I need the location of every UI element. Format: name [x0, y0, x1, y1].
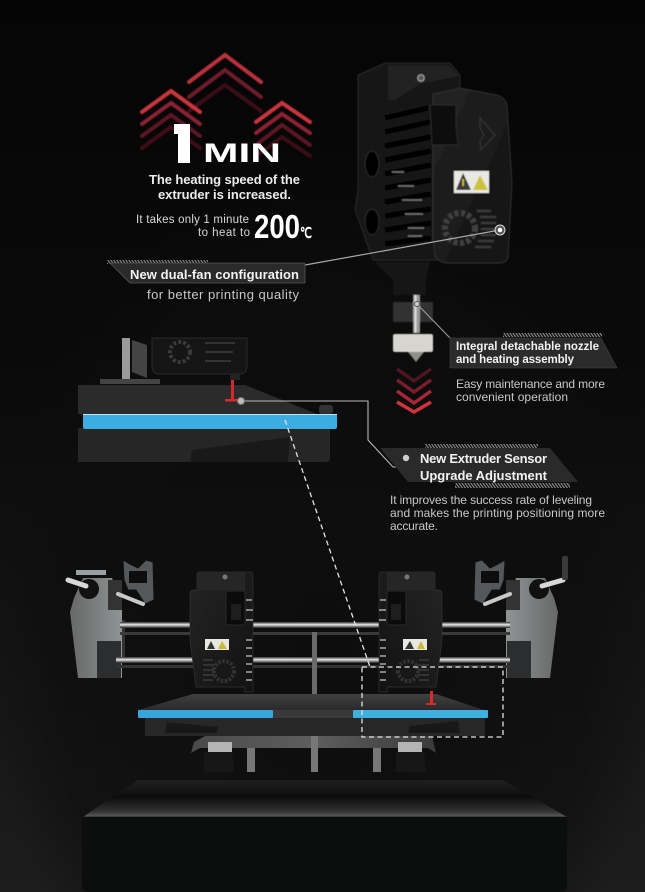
left gantry bracket [68, 560, 154, 678]
text: heating speed: The heating speed of the [149, 172, 300, 187]
text: one minute to 200 degrees: ℃ [300, 225, 312, 242]
right gantry bracket [474, 560, 563, 678]
cropped extruder [152, 338, 247, 380]
red sensor beam [225, 380, 239, 402]
text: one minute to 200 degrees: to heat to [198, 227, 250, 239]
description [456, 377, 605, 404]
leader dot [414, 302, 420, 306]
leader line [417, 304, 450, 338]
heading: 1 MIN [174, 124, 281, 168]
heating block [393, 334, 433, 352]
heat break [375, 262, 433, 333]
blue plate [83, 414, 337, 429]
bed bracket ribs [190, 437, 290, 462]
text: heating speed: extruder is increased. [158, 187, 291, 202]
text: one minute to 200 degrees: It takes only 1 minute [136, 214, 249, 226]
description: and makes the printing positioning more [390, 506, 605, 520]
print bed [138, 691, 488, 736]
fan slats [475, 211, 496, 247]
under-bed supports [191, 736, 436, 772]
right small extruder [379, 572, 442, 692]
extruder rear housing [355, 63, 460, 260]
side holes [365, 151, 379, 235]
callout: dual-fan configuration [107, 225, 505, 302]
description: accurate. [390, 519, 438, 533]
description: convenient operation [456, 390, 568, 404]
icon: red heat chevrons [142, 55, 310, 156]
label text [420, 451, 548, 483]
leader line [241, 401, 406, 467]
left vents [385, 108, 431, 244]
icon: red down chevrons [397, 369, 431, 412]
stripes [107, 260, 208, 264]
label dot [403, 455, 409, 461]
text: heating speed [149, 172, 300, 202]
clip block [430, 105, 458, 145]
left small extruder [190, 572, 253, 692]
label text [456, 341, 599, 366]
guide rails [116, 622, 510, 696]
extruder front cover [433, 88, 512, 263]
icon: top screw [418, 75, 424, 81]
bed base [78, 428, 330, 462]
base rail [100, 379, 160, 384]
leader dot [495, 225, 505, 235]
label plate [380, 448, 578, 482]
icon: arrow logo [480, 118, 495, 150]
label text: Integral detachable nozzle [456, 341, 599, 353]
extruder top cap [388, 65, 459, 100]
icon: fan grille [445, 213, 475, 243]
sensor dot [238, 398, 244, 404]
label plate [450, 338, 617, 368]
label plate [110, 263, 305, 283]
label text: New dual-fan configuration [130, 267, 299, 282]
label text: New Extruder Sensor [420, 451, 547, 466]
end stop [319, 405, 333, 414]
stripes bottom [455, 483, 570, 488]
nozzle tip [408, 352, 424, 362]
leader line [305, 230, 500, 265]
callout: nozzle assembly [414, 302, 617, 404]
description: It improves the success rate of leveling [390, 493, 592, 507]
warning label [454, 171, 489, 193]
heading: 1 MIN: MIN [203, 138, 281, 168]
text: one minute to 200 degrees [136, 208, 312, 245]
callout: extruder sensor [238, 398, 605, 533]
stripes [503, 333, 602, 337]
dashed zoom indicator [285, 420, 503, 737]
icon: crank handle [562, 556, 568, 580]
printer platform [82, 780, 567, 892]
frame arms [132, 340, 147, 378]
label text: and heating assembly [456, 354, 575, 366]
description: for better printing quality [147, 287, 300, 302]
text: one minute to 200 degrees: 200 [254, 208, 300, 245]
stripes top [425, 444, 538, 448]
full printer [68, 556, 568, 772]
label text: Upgrade Adjustment [420, 468, 548, 483]
description: Easy maintenance and more [456, 377, 605, 391]
main extruder [355, 63, 512, 362]
description [390, 493, 605, 533]
bed top surface [78, 385, 317, 414]
sensor detail view [78, 338, 337, 462]
printer frame post [122, 338, 130, 380]
